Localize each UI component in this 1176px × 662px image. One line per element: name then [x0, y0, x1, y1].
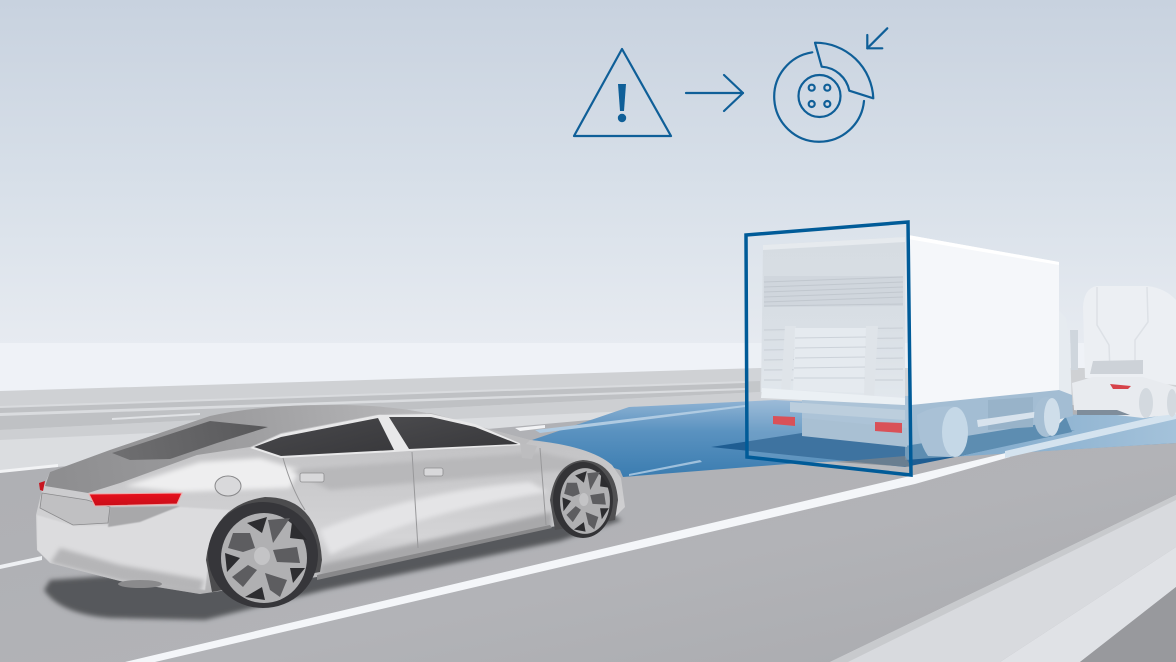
car — [36, 405, 625, 620]
truck box side — [908, 235, 1059, 405]
truck — [711, 235, 1078, 467]
truck bumper and under-run — [790, 402, 905, 420]
truck chassis — [802, 390, 1073, 446]
bumper reflection — [108, 506, 180, 527]
tail light — [89, 493, 182, 506]
small inward arrow — [867, 28, 887, 48]
wheel arch — [206, 497, 322, 592]
side window trim — [250, 414, 524, 458]
car ahead shadow — [1077, 410, 1130, 415]
truck rear door — [761, 237, 905, 405]
trunk panel — [40, 493, 110, 525]
tyre — [208, 502, 318, 608]
door seams — [283, 448, 546, 548]
sky background — [0, 0, 1176, 345]
exclamation mark — [618, 84, 626, 122]
sill — [317, 525, 552, 580]
wheel arch — [550, 460, 618, 530]
wing mirror — [520, 443, 537, 459]
arrow: warning to brake — [686, 75, 743, 111]
autonomous truck — [1083, 286, 1176, 385]
sill shade — [320, 512, 552, 582]
body shading — [37, 452, 610, 594]
radar beam — [532, 400, 1176, 477]
tyre — [553, 462, 613, 538]
rim — [560, 468, 610, 534]
disc — [774, 52, 864, 142]
car shadow — [44, 510, 622, 620]
rear wheel — [206, 497, 322, 608]
rear deck and roof — [45, 405, 530, 493]
pale horizon band — [0, 343, 1176, 403]
truck front wheel — [1034, 397, 1058, 437]
road surfaces — [0, 368, 1176, 662]
door handles — [300, 473, 324, 482]
truck shadow — [711, 430, 1075, 467]
rear side window — [254, 418, 394, 456]
car ahead body — [1072, 377, 1176, 418]
translucent detection plane — [745, 222, 911, 475]
right shoulder — [830, 495, 1176, 662]
truck rear wheel — [917, 406, 968, 457]
side highlight — [320, 482, 548, 555]
fuel cap — [215, 476, 241, 496]
car ahead wheel — [1139, 388, 1153, 418]
hub — [798, 75, 840, 117]
vehicle ahead — [1072, 286, 1176, 418]
rim — [221, 513, 307, 603]
brake caliper — [815, 43, 873, 98]
truck cab — [1058, 310, 1072, 424]
front side window — [389, 417, 518, 449]
icon: warning triangle — [574, 49, 671, 136]
lane markings — [0, 412, 1176, 662]
rear quarter — [37, 507, 230, 590]
front wheel — [550, 460, 618, 538]
rear lower shade — [50, 548, 204, 594]
rear window — [112, 421, 268, 460]
car ahead tail light — [1110, 384, 1131, 389]
shoulder highlight — [125, 458, 300, 492]
icon: brake disc — [774, 28, 887, 142]
tail lift — [781, 326, 796, 392]
exhaust — [118, 580, 162, 588]
truck rear lights — [773, 416, 795, 426]
car body — [36, 405, 625, 594]
